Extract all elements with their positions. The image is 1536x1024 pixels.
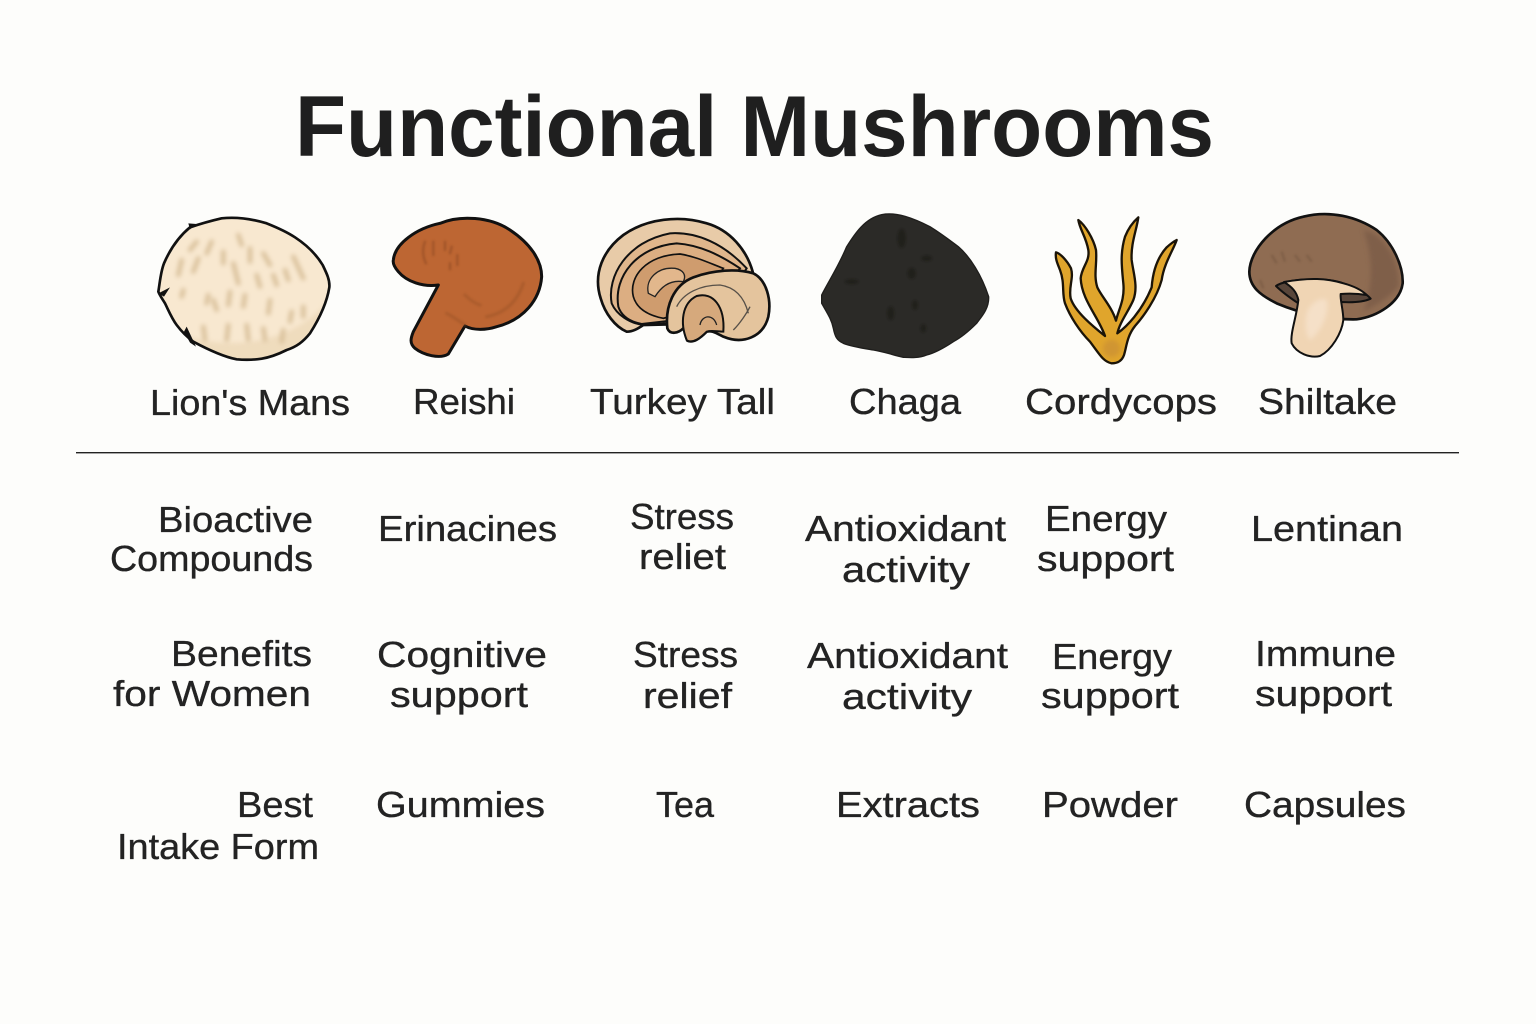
row: bioactive compounds: Bioactive [158,499,313,540]
row: bioactive compounds: Antioxidant [805,508,1006,549]
row: bioactive compounds: Compounds [110,538,313,579]
row: bioactive compounds: reliet [639,536,726,577]
row: best intake form: Powder [1042,784,1178,825]
icon: chaga [822,214,989,358]
row: best intake form: Best [237,784,313,825]
row: benefits for women: for Women [113,673,311,714]
row: bioactive compounds: Erinacines [378,508,557,549]
row: bioactive compounds: activity [842,549,970,590]
title: Functional Mushrooms [295,79,1214,175]
row: best intake form: Gummies [376,784,545,825]
mushroom names: Reishi [413,381,515,422]
mushroom names: Cordycops [1025,381,1217,422]
row: benefits for women: Stress [633,634,738,675]
row: benefits for women: activity [842,676,972,717]
icon: reishi [393,218,542,356]
row: benefits for women: Benefits [171,633,312,674]
row: benefits for women: support [1255,673,1392,714]
row: benefits for women: Energy [1052,636,1172,677]
row: benefits for women [113,633,1396,717]
row: best intake form: Capsules [1244,784,1406,825]
mushroom names: Shiltake [1258,381,1397,422]
mushroom names: Lion's Mans [150,382,350,423]
row: benefits for women: Immune [1255,633,1396,674]
icon: cordyceps [1056,217,1177,363]
row: bioactive compounds: Energy [1045,498,1167,539]
row: best intake form: Tea [656,784,715,825]
icon: lion's mane [158,218,329,367]
row: bioactive compounds: support [1037,538,1174,579]
icon: shiitake [1249,214,1403,357]
row: bioactive compounds: Stress [630,496,734,537]
row: benefits for women: support [390,674,528,715]
icon: turkey tail [598,219,769,341]
row: best intake form [117,784,1406,867]
row: benefits for women: support [1041,675,1179,716]
row: best intake form: Intake Form [117,826,319,867]
mushroom names [150,381,1397,423]
row: bioactive compounds: Lentinan [1251,508,1403,549]
row: bioactive compounds [110,496,1403,590]
row: benefits for women: Cognitive [377,634,547,675]
mushroom names: Chaga [849,381,962,422]
row: benefits for women: Antioxidant [807,635,1008,676]
mushroom names: Turkey Tall [590,381,775,422]
row: benefits for women: relief [643,675,733,716]
row: best intake form: Extracts [836,784,980,825]
